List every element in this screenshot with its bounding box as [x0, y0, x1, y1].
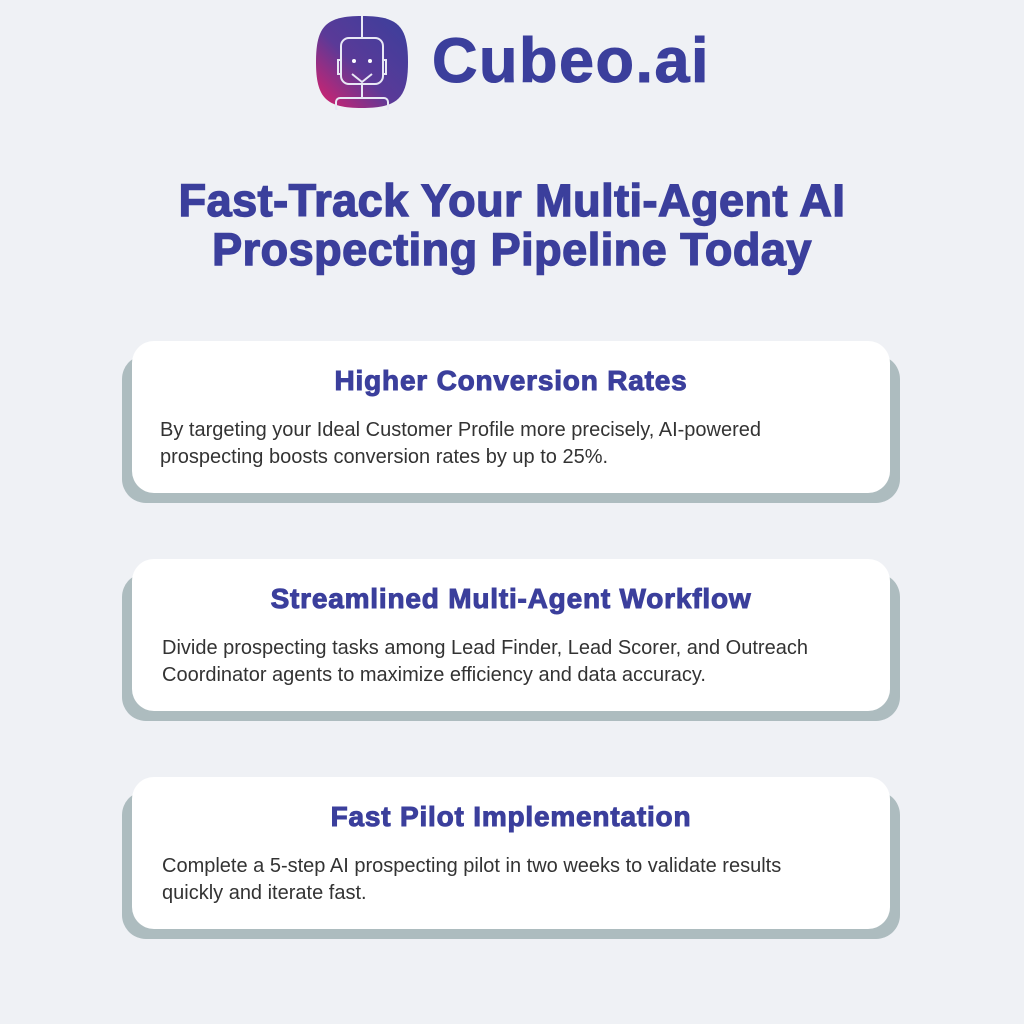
heading: Fast Pilot Implementation	[331, 801, 691, 832]
logo	[316, 16, 710, 110]
title: Fast-Track Your Multi-Agent AI	[179, 175, 845, 226]
panel: higher conversion rates	[122, 341, 900, 503]
panel: streamlined workflow	[122, 559, 900, 721]
title	[179, 175, 845, 276]
panel: fast pilot	[122, 777, 900, 939]
text block: Divide prospecting tasks among Lead Finder, Lead Scorer, and Outreach Coordinator agents to maximize efficiency and data accuracy.	[162, 637, 808, 686]
text block: By targeting your Ideal Customer Profile more precisely, AI-powered prospecting boosts conversion rates by up to 25%.	[160, 419, 761, 468]
text block: Complete a 5-step AI prospecting pilot in two weeks to validate results quickly and iterate fast.	[162, 855, 781, 904]
heading: Streamlined Multi-Agent Workflow	[271, 583, 751, 614]
title: Prospecting Pipeline Today	[212, 224, 812, 275]
logo text: Cubeo.ai	[432, 26, 710, 96]
heading: Higher Conversion Rates	[335, 365, 687, 396]
icon: robot	[316, 16, 408, 110]
